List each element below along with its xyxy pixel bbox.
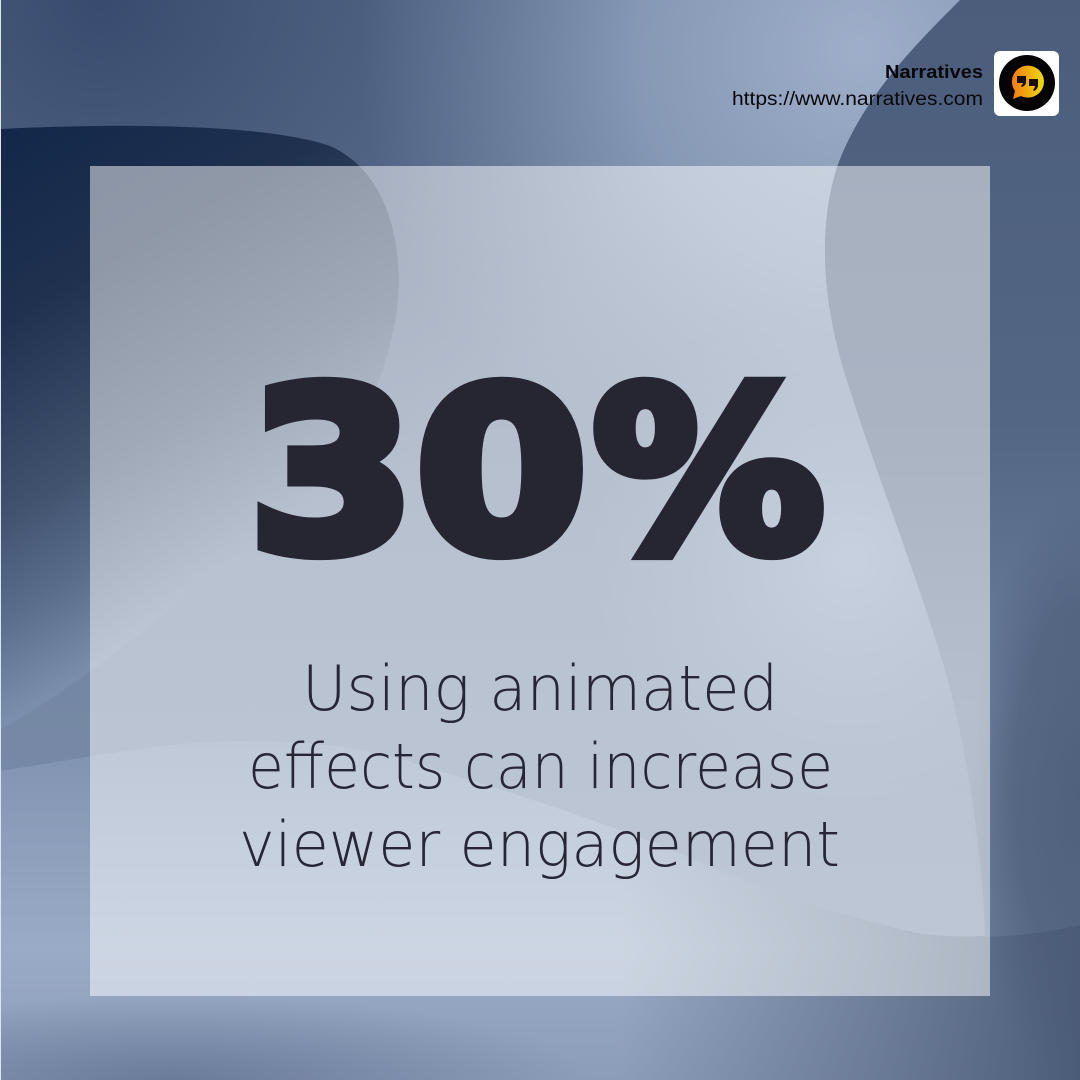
- description text: Using animated: [302, 652, 778, 725]
- brand name and URL: [732, 61, 983, 110]
- brand name and URL: https://www.narratives.com: [732, 89, 983, 110]
- statistic: 30%: [249, 342, 824, 603]
- description text: [239, 652, 840, 881]
- icon: Narratives logo: [994, 51, 1059, 116]
- statistic: 30%: 3: [249, 342, 415, 603]
- brand name and URL: Narratives: [885, 61, 983, 82]
- translucent panel: [90, 166, 990, 996]
- statistic: 30%: 0: [416, 342, 587, 603]
- statistic: 30%: %: [593, 342, 824, 603]
- description text: effects can increase: [248, 730, 833, 803]
- description text: viewer engagement: [239, 808, 840, 881]
